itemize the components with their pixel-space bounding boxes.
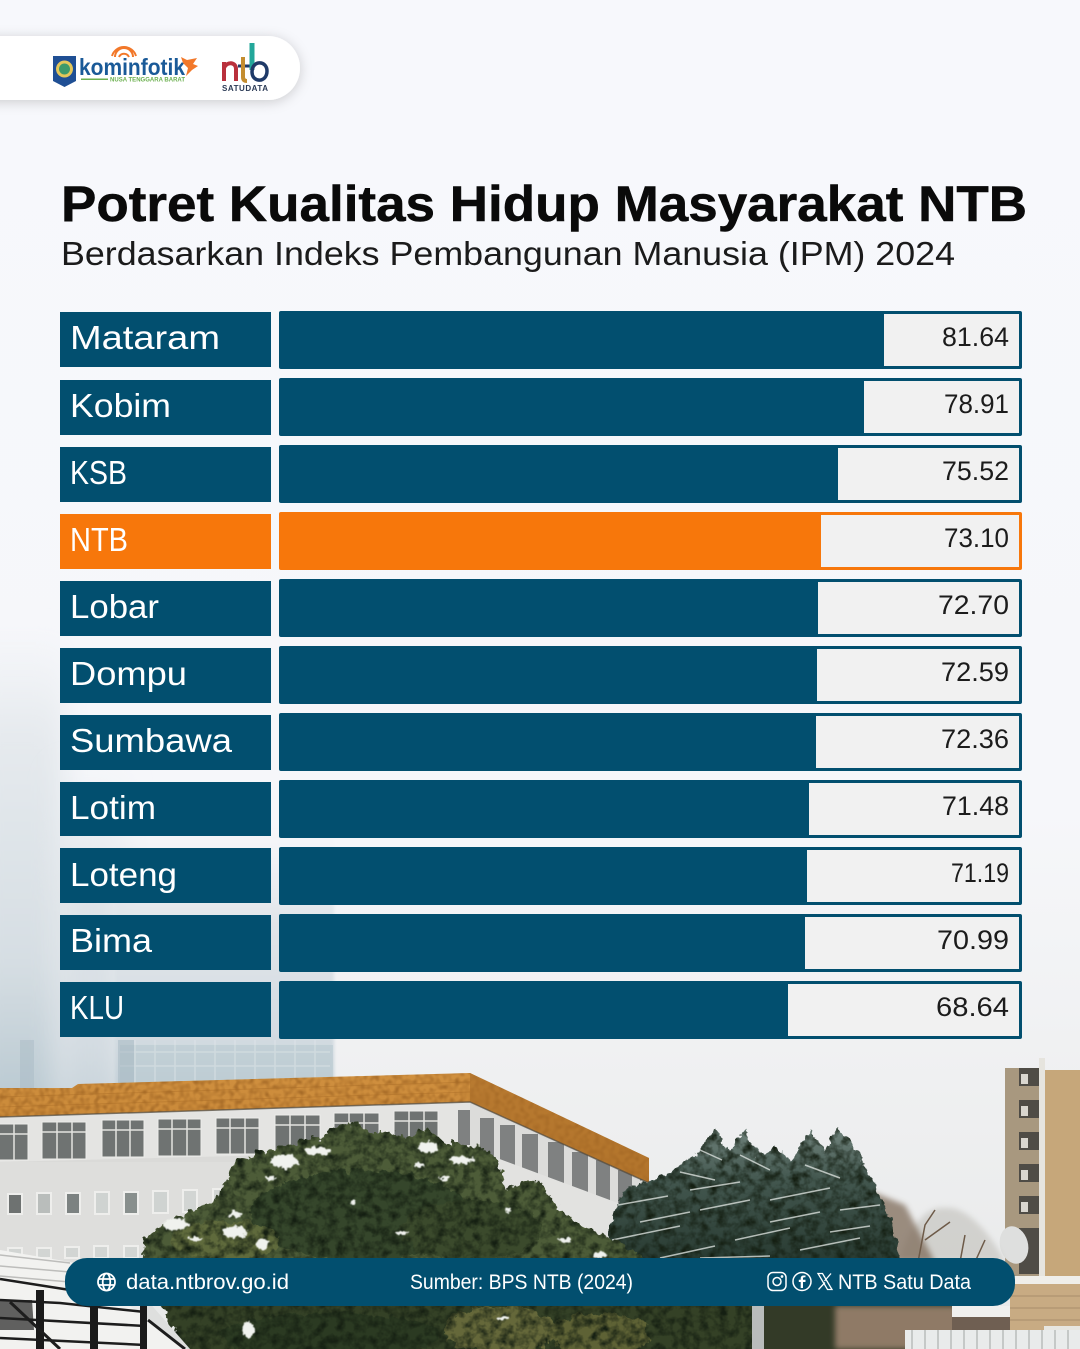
row: KLU: 68.64 <box>936 992 1009 1022</box>
bottom strip trees, pole, railing <box>752 1306 1080 1349</box>
row: Sumbawa: 72.36 <box>941 724 1009 754</box>
row: Sumbawa: Sumbawa <box>70 722 233 759</box>
row: Bima <box>60 914 1022 972</box>
row: Dompu <box>60 646 1022 704</box>
side wing windows <box>470 1104 650 1218</box>
row: NTB (highlighted): NTB <box>70 521 128 558</box>
row: Bima: Bima <box>70 922 153 959</box>
row: Kobim: Kobim <box>70 387 171 424</box>
snowy walkway roof with black rails <box>0 1250 190 1349</box>
icon: NTB provincial shield <box>53 56 76 87</box>
lower windows <box>8 1189 227 1258</box>
row: KSB: KSB <box>70 454 127 491</box>
bare trees on the right <box>855 1190 1005 1262</box>
row: KLU: KLU <box>70 989 124 1026</box>
foreground foliage below footer <box>158 1300 770 1349</box>
row: NTB (highlighted) <box>60 512 1022 570</box>
row: Dompu: 72.59 <box>941 657 1009 687</box>
row: Mataram <box>60 311 1022 369</box>
ntb satu data logo: SATUDATA <box>222 84 268 93</box>
bar chart: IPM by region <box>60 311 1022 1039</box>
row: Kobim: 78.91 <box>944 389 1009 419</box>
snow on leafy tree <box>163 1141 607 1338</box>
row: Mataram: 81.64 <box>942 322 1009 352</box>
row: Kobim <box>60 378 1022 436</box>
row: Lobar <box>60 579 1022 637</box>
row: Lotim: 71.48 <box>942 791 1009 821</box>
row: Lotim: Lotim <box>70 789 156 826</box>
main building <box>0 1073 650 1290</box>
roof fascia <box>0 1073 649 1183</box>
green leafy tree <box>143 1122 770 1349</box>
icon: globe <box>98 1274 115 1290</box>
icon: X <box>818 1274 832 1290</box>
social handle: NTB Satu Data <box>838 1271 971 1294</box>
website: data.ntbrov.go.id <box>126 1271 289 1294</box>
snowy cedar tree <box>608 1128 900 1268</box>
row: Bima: 70.99 <box>937 925 1009 955</box>
row: Loteng: Loteng <box>70 856 177 893</box>
upper windows <box>0 1111 438 1160</box>
row: KLU <box>60 981 1022 1039</box>
row: Lobar: Lobar <box>70 588 159 625</box>
title: Potret Kualitas Hidup Masyarakat NTB <box>61 176 1027 232</box>
row: Sumbawa <box>60 713 1022 771</box>
kominfotik wordmark: NUSA TENGGARA BARAT <box>110 78 185 84</box>
logo pill <box>0 36 300 100</box>
source: Sumber: BPS NTB (2024) <box>410 1271 633 1294</box>
row: Lotim <box>60 780 1022 838</box>
subtitle: Berdasarkan Indeks Pembangunan Manusia (IPM) 2024 <box>61 235 955 272</box>
footer bar <box>65 1258 1015 1306</box>
foggy tower in background <box>0 630 334 1140</box>
row: Mataram: Mataram <box>70 319 220 356</box>
row: Loteng: 71.19 <box>951 858 1009 888</box>
kominfotik wordmark: kominfotik <box>79 54 185 80</box>
row: NTB (highlighted): 73.10 <box>944 523 1009 553</box>
row: KSB <box>60 445 1022 503</box>
icon: instagram <box>768 1272 786 1290</box>
right brick tower <box>996 1058 1080 1349</box>
ntb satu data logo <box>222 43 268 93</box>
row: Dompu: Dompu <box>70 655 187 692</box>
row: KSB: 75.52 <box>942 456 1009 486</box>
row: Lobar: 72.70 <box>938 590 1009 620</box>
row: Loteng <box>60 847 1022 905</box>
icon: facebook <box>793 1272 811 1290</box>
kominfotik wordmark <box>79 47 198 84</box>
